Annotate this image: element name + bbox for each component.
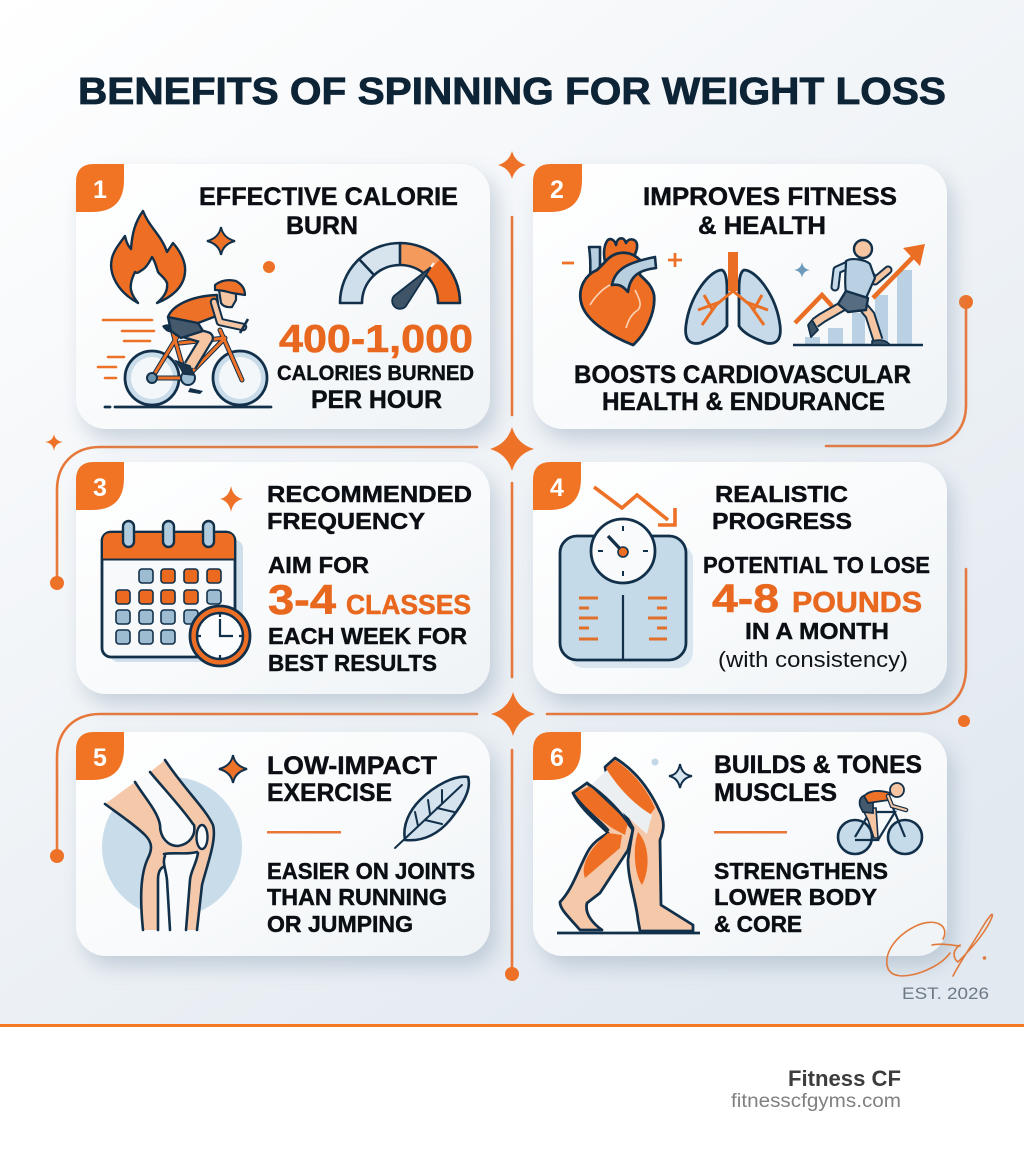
icon: leg muscles <box>557 758 700 933</box>
text: strengthens: & CORE <box>714 911 802 937</box>
text: calories burned per hour: CALORIES BURNED <box>277 362 474 385</box>
heading 2: IMPROVES FITNESS <box>643 183 897 211</box>
heading 6 <box>714 751 922 807</box>
panel 1: effective calorie burn <box>76 164 490 429</box>
stat: 4-8 pounds: 4-8 <box>712 577 779 621</box>
dot <box>652 758 658 766</box>
text: strengthens <box>714 858 888 937</box>
badge 3: 3 <box>93 474 107 502</box>
panel 4: realistic progress <box>533 462 947 694</box>
signature <box>887 914 992 976</box>
heading 4 <box>712 481 852 534</box>
divider 5 <box>267 831 341 834</box>
stat: 3-4 classes: CLASSES <box>346 589 471 620</box>
icon: small cyclist <box>838 783 922 854</box>
est. 2026: EST. 2026 <box>902 984 989 1003</box>
badge 1: 1 <box>93 176 107 204</box>
heading 2: & HEALTH <box>698 212 826 240</box>
heading 5: LOW-IMPACT <box>267 752 437 780</box>
stat: 4-8 pounds <box>712 577 922 621</box>
icon: calendar with clock <box>102 521 250 666</box>
text: calories burned per hour: PER HOUR <box>311 386 442 414</box>
icon: down arrow <box>594 487 675 525</box>
heading 5: EXERCISE <box>267 779 392 807</box>
icon: heart <box>562 238 682 345</box>
stat: 400-1,000: 400-1,000 <box>279 318 473 361</box>
title: BENEFITS OF SPINNING FOR WEIGHT LOSS <box>78 71 946 113</box>
panel 5: low-impact exercise <box>76 732 490 956</box>
heading 3 <box>267 481 472 534</box>
divider 6 <box>714 831 787 834</box>
icon: gauge <box>340 243 460 309</box>
badge 3 <box>76 462 124 510</box>
panel 6: builds and tones muscles <box>533 732 947 956</box>
heading 1 <box>199 183 458 240</box>
dot <box>263 261 275 273</box>
heading 4: PROGRESS <box>712 508 852 534</box>
text: easier on joints: THAN RUNNING <box>267 884 447 910</box>
stat: 3-4 classes: 3-4 <box>268 576 337 623</box>
badge 4 <box>533 462 581 510</box>
icon: sparkle <box>207 227 235 255</box>
text: aim for: AIM FOR <box>268 552 369 578</box>
text: each week for best results: EACH WEEK FOR <box>268 623 467 649</box>
connector lines and stars <box>45 151 973 981</box>
badge 6: 6 <box>550 744 564 772</box>
panel 3: recommended frequency <box>76 462 490 694</box>
icon: cyclist <box>98 280 271 407</box>
text: calories burned per hour <box>277 362 474 414</box>
text: boosts cardiovascular: BOOSTS CARDIOVASCULAR <box>574 361 911 389</box>
sparkle <box>220 486 243 512</box>
heading 4: REALISTIC <box>715 481 848 507</box>
badge 2: 2 <box>550 176 564 204</box>
icon: scale <box>560 519 693 668</box>
icon: sparkle <box>219 755 247 783</box>
icon: knee joint <box>102 760 242 930</box>
text: potential to lose: POTENTIAL TO LOSE <box>703 552 930 578</box>
badge 5: 5 <box>93 744 107 772</box>
text: easier on joints <box>267 858 475 937</box>
text: easier on joints: EASIER ON JOINTS <box>267 858 475 884</box>
badge 1 <box>76 164 124 212</box>
stat: 4-8 pounds: POUNDS <box>792 587 922 619</box>
text: strengthens: LOWER BODY <box>714 884 877 910</box>
text: each week for best results <box>268 623 467 676</box>
heading 6: BUILDS & TONES <box>714 751 922 779</box>
heading 1: EFFECTIVE CALORIE <box>199 183 458 211</box>
footer brand: Fitness CF <box>788 1066 901 1091</box>
stat: 3-4 classes <box>268 576 471 623</box>
icon: flame <box>111 211 185 303</box>
text: strengthens: STRENGTHENS <box>714 858 888 884</box>
heading 6: MUSCLES <box>714 779 837 807</box>
icon: sparkle <box>669 764 692 788</box>
icon: lungs <box>686 252 780 343</box>
text: easier on joints: OR JUMPING <box>267 911 413 937</box>
panel 2: improves fitness and health <box>533 164 947 429</box>
badge 2 <box>533 164 582 212</box>
heading 5 <box>267 752 437 807</box>
heading 1: BURN <box>286 212 358 240</box>
text: each week for best results: BEST RESULTS <box>268 650 437 676</box>
badge 5 <box>76 732 124 780</box>
footer url: fitnesscfgyms.com <box>731 1091 901 1112</box>
badge 4: 4 <box>550 474 564 502</box>
icon: feather <box>395 777 469 848</box>
text: boosts cardiovascular <box>574 361 911 416</box>
badge 6 <box>533 732 581 780</box>
icon: runner with rising chart <box>793 240 925 345</box>
heading 3: FREQUENCY <box>267 508 425 534</box>
heading 3: RECOMMENDED <box>267 481 472 507</box>
footer bar <box>0 1024 1024 1154</box>
text: boosts cardiovascular: HEALTH & ENDURANCE <box>602 388 885 416</box>
text: in a month: IN A MONTH <box>745 618 889 644</box>
text: with consistency: (with consistency) <box>718 647 908 672</box>
heading 2 <box>643 183 897 240</box>
